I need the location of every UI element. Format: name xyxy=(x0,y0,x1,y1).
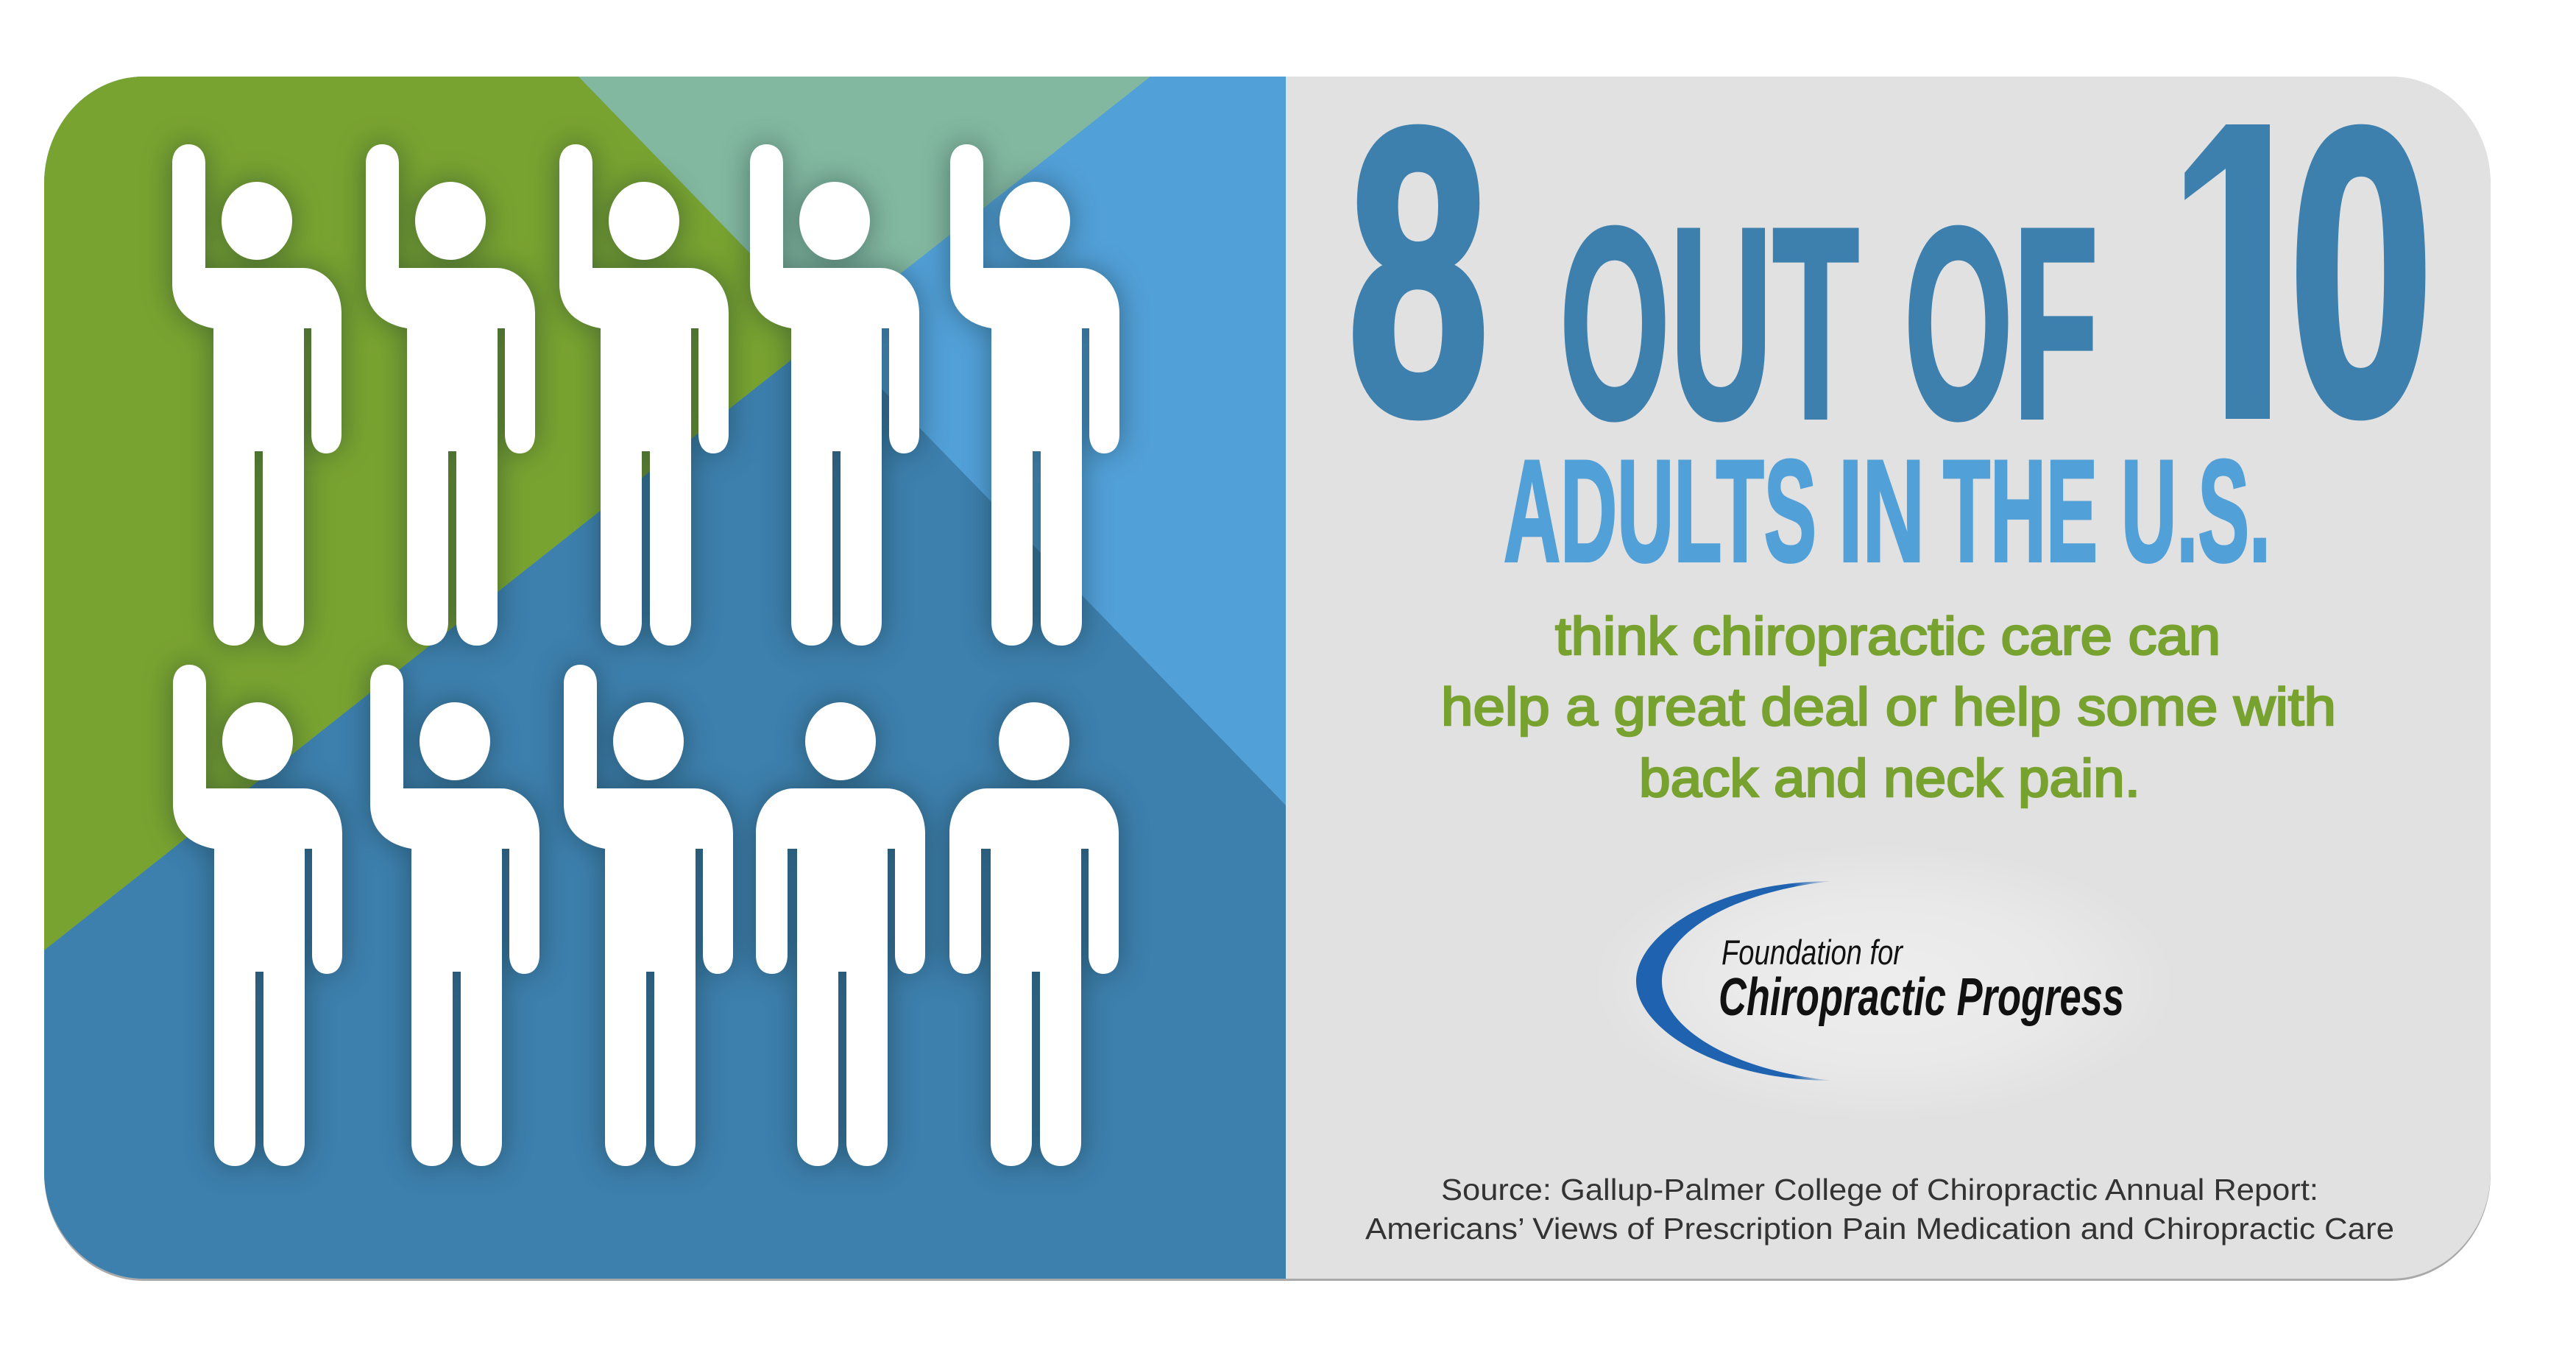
icon: person raised hand 7 xyxy=(370,665,539,1166)
icon: person arms down 9 xyxy=(756,702,925,1166)
logo text xyxy=(1719,933,2124,1027)
logo text: Chiropractic Progress xyxy=(1719,968,2124,1027)
text block: think chiropractic care xyxy=(1441,607,2336,808)
logo text: Foundation for xyxy=(1722,933,1904,972)
subheading: adults in the U.S.: U.S. xyxy=(2121,430,2271,592)
source note: Americans’ Views of Prescription Pain Medication and Chiropractic Care xyxy=(1365,1212,2394,1246)
panel: light blue background xyxy=(44,77,1286,1279)
source note xyxy=(1365,1173,2394,1246)
panel: mint triangle xyxy=(578,77,1150,274)
heading: 8 out of 10: OF xyxy=(1904,172,2098,476)
icon: person raised hand 3 xyxy=(559,144,729,646)
icon: person raised hand 1 xyxy=(172,144,342,646)
text block: think chiropractic care: back and neck pain. xyxy=(1639,749,2140,808)
icon group: ten people xyxy=(172,144,1119,1166)
logo: Foundation for Chiropractic Progress xyxy=(1590,843,2179,1123)
heading: 8 out of 10: 1 xyxy=(2182,51,2307,505)
panel: text background xyxy=(1286,77,2491,1279)
text block: think chiropractic care: think chiropractic care can xyxy=(1555,607,2221,666)
panel: dark blue polygon xyxy=(44,332,1286,1279)
text block: think chiropractic care: help a great deal or help some with xyxy=(1441,678,2336,737)
icon: person raised hand 5 xyxy=(950,144,1119,646)
subheading: adults in the U.S.: THE xyxy=(1943,430,2098,592)
panel: green triangle xyxy=(44,77,827,950)
source note: Source: Gallup-Palmer College of Chiropractic Annual Report: xyxy=(1441,1173,2318,1207)
icon: blue crescent xyxy=(1636,881,1833,1081)
heading: 8 out of 10: OUT xyxy=(1560,172,1859,476)
icon: person raised hand 6 xyxy=(173,665,342,1166)
icon: person arms down 10 xyxy=(949,702,1119,1166)
icon: person raised hand 8 xyxy=(564,665,733,1166)
heading: 8 out of 10 xyxy=(1353,124,2426,423)
icon: person raised hand 4 xyxy=(750,144,919,646)
heading: 8 out of 10: 0 xyxy=(2289,44,2433,498)
subheading: adults in the U.S.: ADULTS xyxy=(1504,430,1816,592)
heading: 8 out of 10: 8 xyxy=(1348,44,1489,498)
subheading: adults in the U.S.: IN xyxy=(1839,430,1925,592)
icon: person raised hand 2 xyxy=(366,144,535,646)
